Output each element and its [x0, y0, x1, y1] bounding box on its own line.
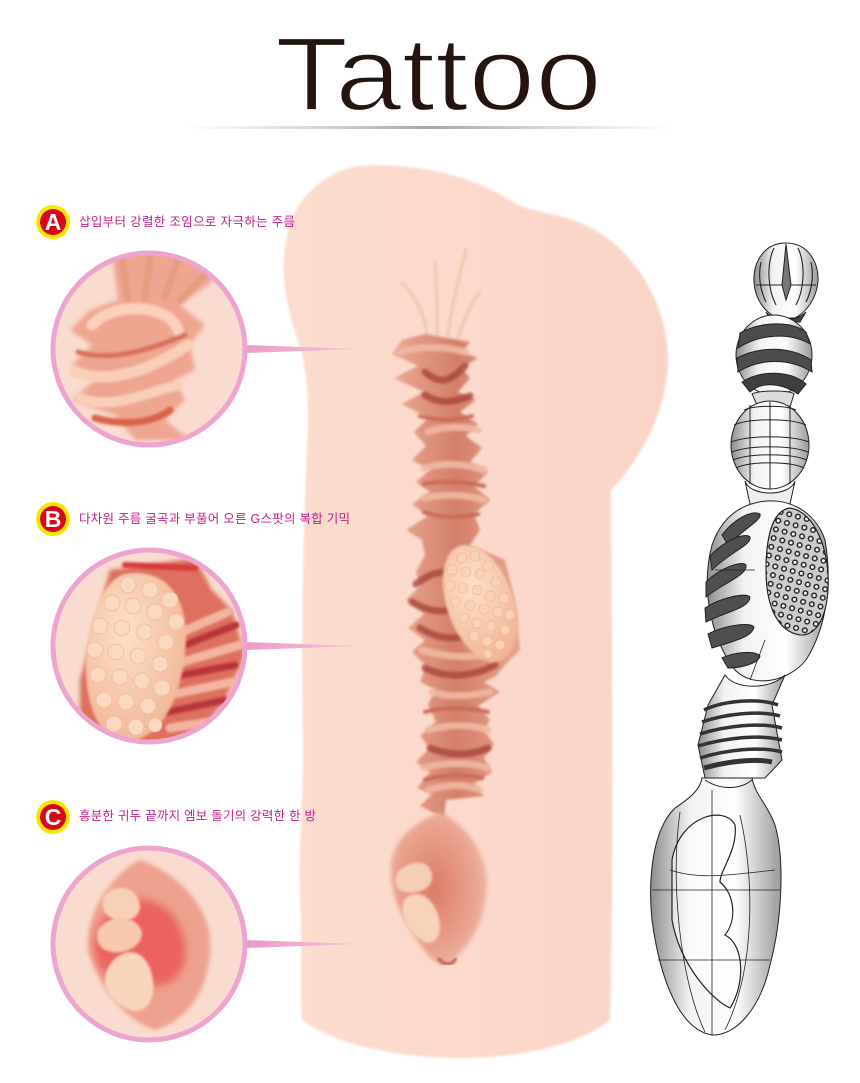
callout pointer B — [246, 642, 358, 650]
badge B: B — [45, 506, 61, 532]
badge A: A — [45, 209, 61, 235]
caption A: 삽입부터 강렬한 조임으로 자극하는 주름 — [79, 215, 295, 229]
badge C: C — [45, 804, 61, 830]
callout B heading — [36, 502, 350, 536]
wireframe: ribbed ball — [736, 315, 812, 407]
caption C: 흥분한 귀두 끝까지 엠보 돌기의 강력한 한 방 — [79, 809, 316, 823]
badge A — [36, 205, 70, 239]
detail circle B: textured bulge — [50, 547, 250, 747]
title divider — [185, 126, 675, 129]
wireframe: ribbed textured section — [705, 501, 828, 681]
opening folds — [402, 250, 480, 338]
callout pointer C — [246, 940, 358, 948]
detail circle A: entry ribs — [50, 250, 250, 450]
title: Tattoo — [275, 16, 602, 133]
end chamber — [391, 812, 487, 965]
textured G-spot bulge — [443, 545, 518, 662]
callout C heading — [36, 800, 316, 834]
badge B — [36, 502, 70, 536]
wireframe: ridged neck — [698, 675, 785, 778]
detail circle C: end chamber — [50, 845, 250, 1045]
callout pointer A — [246, 345, 358, 353]
callout A heading — [36, 205, 295, 239]
wireframe: head bulb — [754, 243, 818, 322]
ribbed inner canal — [392, 334, 520, 818]
wireframe diagram — [651, 243, 828, 1035]
wireframe: bottom bulb — [651, 778, 781, 1035]
product body — [284, 165, 668, 1058]
wireframe: third bulb — [731, 401, 809, 504]
caption B: 다차원 주름 굴곡과 부풀어 오른 G스팟의 복합 기믹 — [79, 512, 350, 526]
badge C — [36, 800, 70, 834]
